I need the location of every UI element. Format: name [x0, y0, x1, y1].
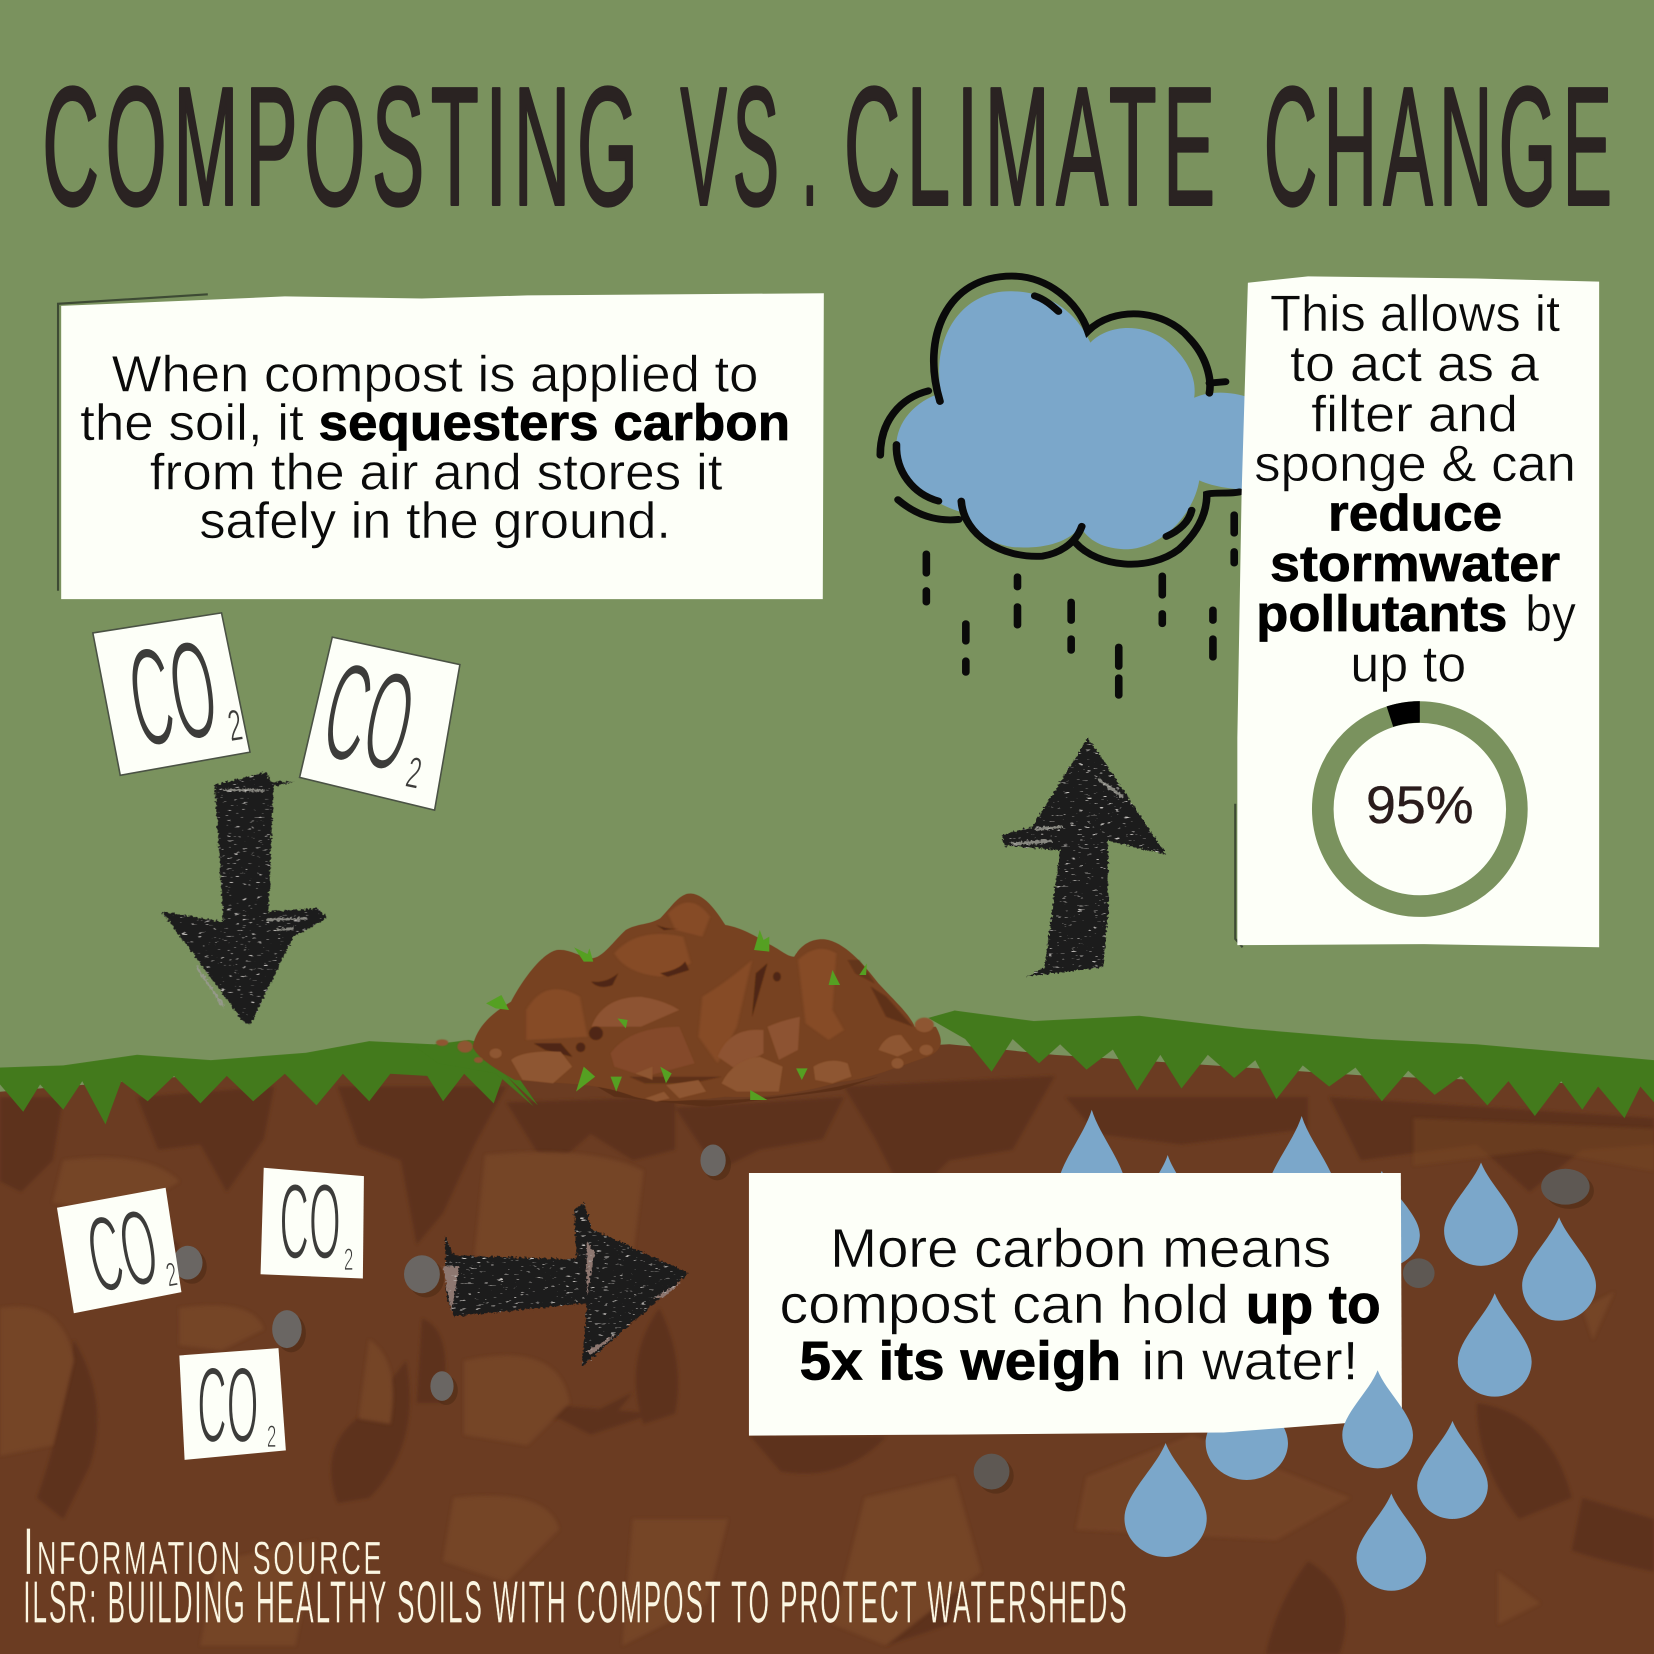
icon: CO2 card soil top: CO [280, 1161, 341, 1281]
icon: CO2 card soil left: CO [79, 1186, 166, 1316]
panel: water holding text: 5x its weigh [800, 1330, 1121, 1392]
panel: water holding text: More carbon means [830, 1217, 1331, 1279]
icon: CO2 card soil top [261, 1161, 364, 1281]
title: . [802, 52, 823, 241]
title: COMPOSTING [42, 52, 645, 241]
grass: right strip [928, 1011, 1654, 1118]
panel: stormwater filter text and donut: to act as a [1290, 335, 1540, 392]
icon: CO2 card top left: CO [119, 610, 227, 777]
panel: carbon sequestration text: sequesters carbon [319, 394, 790, 451]
water drops behind text panel [1057, 1110, 1420, 1480]
panel: water holding text [749, 1173, 1402, 1436]
panel: carbon sequestration text: safely in the ground. [199, 492, 671, 549]
title: VS [680, 52, 785, 241]
arrow: scribbled right arrow [443, 1203, 689, 1367]
panel: water holding text: up to [1246, 1273, 1381, 1335]
source credit text: NFORMATION SOURCE [37, 1532, 384, 1584]
donut chart: 95%: 95% [1366, 776, 1474, 835]
panel: stormwater filter text and donut: This allows it [1270, 285, 1560, 342]
arrow: scribbled down arrow [162, 772, 327, 1025]
icon: CO2 card top right [300, 632, 460, 810]
panel: stormwater filter text and donut: stormwater [1270, 535, 1560, 592]
panel: stormwater filter text and donut: sponge & can [1254, 435, 1576, 492]
title: CLIMATE [844, 52, 1222, 241]
panel: carbon sequestration text: the soil, it [80, 394, 304, 451]
icon: CO2 card top left: 2 [225, 701, 246, 751]
donut chart: 95% [1323, 701, 1517, 906]
source credit text [23, 1515, 1129, 1635]
panel: carbon sequestration text: from the air and stores it [150, 443, 723, 500]
grass: left strip [0, 1041, 538, 1124]
icon: CO2 card soil bottom: CO [197, 1345, 258, 1465]
panel: water holding text: compost can hold [780, 1273, 1229, 1335]
icon: CO2 card soil bottom: 2 [267, 1418, 276, 1454]
panel: stormwater filter text and donut: reduce [1328, 485, 1502, 542]
panel: stormwater filter text and donut: filter and [1311, 385, 1518, 442]
icon: CO2 card soil left [57, 1183, 182, 1316]
panel: stormwater filter text and donut: up to [1350, 635, 1466, 692]
panel: carbon sequestration text: When compost is applied to [112, 345, 758, 402]
compost pile illustration [415, 893, 941, 1107]
soil ground with texture [0, 1044, 1654, 1654]
panel: stormwater filter text and donut [1235, 276, 1599, 947]
source credit text: I [23, 1515, 36, 1588]
panel: stormwater filter text and donut: pollutants [1256, 585, 1507, 642]
panel: stormwater filter text and donut: by [1525, 585, 1577, 642]
icon: rain cloud [880, 276, 1250, 695]
water drops in front [1124, 1162, 1596, 1591]
icon: CO2 card soil left: 2 [163, 1255, 180, 1295]
icon: CO2 card soil bottom [179, 1345, 286, 1465]
rocks in soil [173, 1145, 1594, 1494]
icon: CO2 card top right: 2 [402, 748, 426, 799]
icon: CO2 card top left [93, 606, 250, 777]
panel: carbon sequestration text [58, 293, 824, 599]
arrow: scribbled up arrow [1002, 738, 1166, 976]
icon: CO2 card soil top: 2 [344, 1241, 353, 1277]
panel: water holding text: in water! [1141, 1330, 1359, 1392]
icon: CO2 card top right: CO [312, 632, 427, 802]
